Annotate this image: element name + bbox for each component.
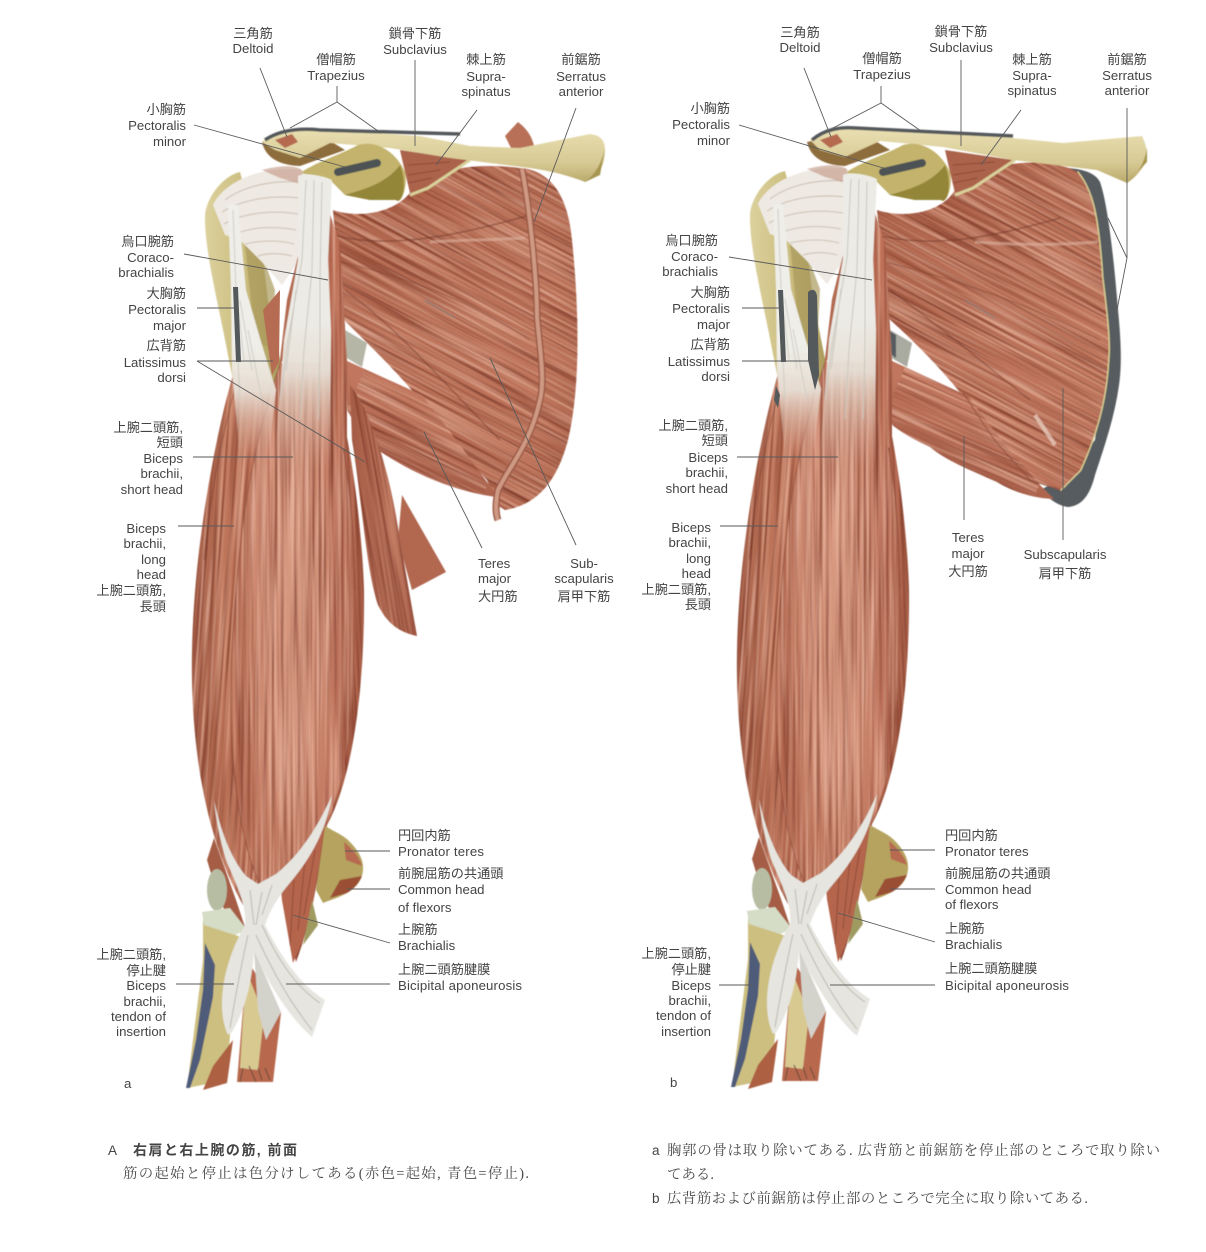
label: Biceps tendon of insertion: insertion [116, 1024, 166, 1039]
label: Biceps short head: 短頭 [702, 433, 728, 448]
label: Serratus anterior: Serratus [556, 69, 606, 84]
label: Biceps short head: 上腕二頭筋, [658, 417, 728, 433]
label: Trapezius: 僧帽筋 [862, 50, 902, 66]
label: Coracobrachialis: 烏口腕筋 [665, 232, 718, 248]
label: Brachialis: Brachialis [945, 937, 1003, 952]
humerus [205, 172, 284, 395]
label: Teres major: 大円筋 [948, 563, 988, 579]
label: Serratus anterior: anterior [1105, 83, 1150, 98]
label: Pectoralis major: 大胸筋 [690, 284, 730, 300]
label: Coracobrachialis: brachialis [118, 265, 174, 280]
label: Latissimus dorsi: 広背筋 [146, 337, 186, 353]
label: Supraspinatus: 棘上筋 [1012, 51, 1052, 67]
label: Biceps short head: Biceps [143, 451, 183, 466]
panel b leader lines [719, 60, 1127, 985]
brachialis muscle [280, 813, 327, 963]
artist signature [240, 1066, 270, 1082]
label: Pectoralis minor: 小胸筋 [690, 100, 730, 116]
latissimus dorsi flap [398, 495, 446, 590]
supraspinatus muscle [400, 150, 470, 195]
label: Biceps long head: Biceps [671, 520, 711, 535]
clavicle [810, 127, 1147, 183]
panel a arm: humerus, biceps, brachialis, forearm bones [151, 166, 397, 1090]
label: Common head of flexors: 前腕屈筋の共通頭 [398, 865, 504, 881]
serratus anterior strap [496, 169, 542, 520]
label: Subscapularis: 肩甲下筋 [1039, 565, 1091, 581]
label: Biceps long head: 上腕二頭筋, [641, 581, 711, 597]
label: Trapezius: Trapezius [853, 67, 911, 82]
label: Pronator teres: 円回内筋 [398, 827, 451, 843]
panel a leader lines [176, 60, 576, 984]
label: Serratus anterior: Serratus [1102, 68, 1152, 83]
label: Pectoralis major: 大胸筋 [146, 285, 186, 301]
label: Trapezius: Trapezius [307, 68, 365, 83]
label: Biceps long head: long [141, 552, 166, 567]
panel b extras: pectoralis and latissimus insertion marks [774, 290, 819, 408]
subscapularis muscle [332, 165, 578, 511]
humerus trochlea [207, 869, 227, 911]
label: Pronator teres: 円回内筋 [945, 827, 998, 843]
label: Latissimus dorsi: Latissimus [124, 355, 186, 370]
label: Serratus anterior: 前鋸筋 [1107, 51, 1147, 67]
label: Subclavius: 鎖骨下筋 [389, 25, 441, 41]
label: Common head of flexors: Common head [945, 882, 1032, 897]
label: Latissimus dorsi: 広背筋 [690, 336, 730, 352]
label: Brachialis: 上腕筋 [398, 921, 438, 937]
teres major muscle [346, 360, 494, 498]
panel letter b: b [670, 1075, 677, 1090]
label: Common head of flexors: Common head [398, 882, 484, 897]
caption: notes a and b [652, 1141, 1160, 1207]
coracobrachialis muscle [310, 200, 355, 455]
label: Serratus anterior: 前鋸筋 [561, 51, 601, 67]
scapula cream rim [1060, 172, 1109, 490]
note a continuation: てある. [667, 1167, 714, 1183]
label: Biceps short head: short head [666, 481, 728, 496]
panel a labels [96, 25, 614, 1091]
figure letter A: A [108, 1143, 117, 1158]
label: Biceps tendon of insertion: Biceps [671, 978, 711, 993]
biceps long head tendon [228, 205, 276, 460]
supraspinatus muscle [945, 150, 1015, 195]
panel b shoulder: scapula, clavicle and shoulder muscles [806, 125, 1148, 508]
biceps long head [151, 356, 319, 924]
label: Pectoralis minor: Pectoralis [128, 118, 186, 133]
label: Subclavius: Subclavius [383, 42, 447, 57]
label: Coracobrachialis: Coraco- [671, 249, 718, 264]
label: Supraspinatus: spinatus [461, 84, 511, 99]
note a text: 胸郭の骨は取り除いてある. 広背筋と前鋸筋を停止部のところで取り除い [667, 1141, 1160, 1159]
label: Serratus anterior: anterior [559, 84, 604, 99]
label: Subscapularis: scapularis [554, 571, 614, 586]
label: Biceps tendon of insertion: Biceps [126, 978, 166, 993]
grey tendon behind the arm [890, 330, 912, 367]
label: Deltoid: Deltoid [232, 41, 274, 56]
label: Pectoralis minor: 小胸筋 [146, 101, 186, 117]
label: Deltoid: 三角筋 [780, 24, 820, 40]
label: Subscapularis: Subscapularis [1024, 547, 1107, 562]
clavicle [262, 128, 605, 182]
note b text: 広背筋および前鋸筋は停止部のところで完全に取り除いてある. [667, 1189, 1088, 1207]
label: Biceps tendon of insertion: tendon of [656, 1008, 711, 1023]
label: Deltoid: Deltoid [779, 40, 821, 55]
label: Teres major: Teres [952, 530, 985, 545]
panel b labels [641, 23, 1152, 1090]
label: Pectoralis major: major [153, 318, 187, 333]
label: Pectoralis minor: minor [697, 133, 731, 148]
coracoid process [845, 144, 951, 201]
note b marker: b [652, 1191, 660, 1206]
label: Subscapularis: 肩甲下筋 [558, 588, 610, 604]
label: Biceps short head: brachii, [140, 466, 183, 481]
acromion underside [262, 136, 345, 166]
biceps distal tendon and aponeurosis [214, 795, 332, 1040]
label: Coracobrachialis: 烏口腕筋 [121, 233, 174, 249]
label: Subclavius: 鎖骨下筋 [935, 23, 987, 39]
label: Biceps tendon of insertion: tendon of [111, 1009, 166, 1024]
label: Common head of flexors: of flexors [945, 897, 999, 912]
grey tendon behind the arm [345, 330, 367, 367]
label: Bicipital aponeurosis: 上腕二頭筋腱膜 [945, 960, 1037, 976]
label: Teres major: major [952, 546, 985, 561]
biceps short head [200, 350, 390, 910]
panel b arm: humerus, biceps, brachialis, forearm bones [696, 165, 942, 1089]
acromion underside [807, 136, 890, 166]
subscapularis muscle [876, 162, 1109, 490]
label: Latissimus dorsi: dorsi [701, 369, 730, 384]
label: Pronator teres: Pronator teres [945, 844, 1029, 859]
medial epicondyle with pronator teres and common flexor heads [316, 826, 363, 903]
label: Pronator teres: Pronator teres [398, 844, 484, 859]
label: Biceps long head: brachii, [668, 535, 711, 550]
subscapularis lower edge over teres major [963, 393, 1060, 490]
label: Pectoralis minor: minor [153, 134, 187, 149]
label: Biceps long head: head [137, 567, 166, 582]
label: Biceps short head: brachii, [685, 465, 728, 480]
label: Biceps long head: 上腕二頭筋, [96, 582, 166, 598]
figure note: 筋の起始と停止は色分けしてある(赤色=起始, 青色=停止). [123, 1164, 529, 1182]
label: Bicipital aponeurosis: Bicipital aponeurosis [945, 978, 1069, 993]
shoulder joint capsule [213, 166, 306, 285]
label: Biceps tendon of insertion: brachii, [123, 994, 166, 1009]
label: Biceps long head: 長頭 [140, 599, 166, 614]
deep arm muscle mass [255, 357, 397, 972]
label: Biceps tendon of insertion: 停止腱 [671, 962, 711, 977]
label: Biceps long head: long [686, 551, 711, 566]
panel letter a: a [124, 1076, 132, 1091]
label: Biceps short head: Biceps [688, 450, 728, 465]
label: Biceps tendon of insertion: 上腕二頭筋, [641, 945, 711, 961]
label: Biceps long head: head [682, 566, 711, 581]
scapula grey border [1040, 168, 1121, 507]
label: Teres major: 大円筋 [478, 588, 518, 604]
label: Biceps tendon of insertion: brachii, [668, 993, 711, 1008]
label: Biceps short head: short head [121, 482, 183, 497]
label: Supraspinatus: spinatus [1007, 83, 1057, 98]
label: Subclavius: Subclavius [929, 40, 993, 55]
label: Coracobrachialis: Coraco- [127, 250, 174, 265]
caption: figure A title and note [108, 1142, 529, 1182]
label: Deltoid: 三角筋 [233, 25, 273, 41]
label: Bicipital aponeurosis: 上腕二頭筋腱膜 [398, 961, 490, 977]
ulna [237, 960, 281, 1082]
figure title: 右肩と右上腕の筋, 前面 [133, 1142, 297, 1158]
panel a extras: pectoralis insertion and latissimus remnant [233, 287, 280, 375]
label: Pectoralis major: Pectoralis [672, 301, 730, 316]
label: Bicipital aponeurosis: Bicipital aponeurosis [398, 978, 522, 993]
muscle strip left of short head tendon [279, 240, 302, 368]
label: Biceps short head: 上腕二頭筋, [113, 419, 183, 435]
label: Supraspinatus: 棘上筋 [466, 51, 506, 67]
label: Biceps long head: Biceps [126, 521, 166, 536]
label: Supraspinatus: Supra- [466, 69, 506, 84]
label: Biceps short head: 短頭 [157, 435, 183, 450]
label: Biceps long head: brachii, [123, 536, 166, 551]
label: Common head of flexors: of flexors [398, 900, 452, 915]
label: Subscapularis: Sub- [570, 556, 598, 571]
label: Supraspinatus: Supra- [1012, 68, 1052, 83]
label: Pectoralis major: major [697, 317, 731, 332]
label: Common head of flexors: 前腕屈筋の共通頭 [945, 865, 1050, 881]
label: Biceps long head: 長頭 [685, 597, 711, 612]
label: Brachialis: 上腕筋 [945, 920, 985, 936]
dark tendon insertion [888, 330, 896, 358]
label: Latissimus dorsi: Latissimus [668, 354, 730, 369]
label: Teres major: Teres [478, 556, 511, 571]
label: Biceps tendon of insertion: 停止腱 [126, 963, 166, 978]
label: Pectoralis major: Pectoralis [128, 302, 186, 317]
panel a shoulder: scapula, clavicle and shoulder muscles [262, 122, 606, 637]
label: Latissimus dorsi: dorsi [157, 370, 186, 385]
label: Pectoralis minor: Pectoralis [672, 117, 730, 132]
serratus anterior top fragment [505, 122, 534, 150]
latissimus dorsi strap [350, 386, 418, 637]
note a marker: a [652, 1143, 660, 1158]
label: Coracobrachialis: brachialis [662, 264, 718, 279]
label: Trapezius: 僧帽筋 [316, 51, 356, 67]
radius [186, 908, 247, 1090]
label: Teres major: major [478, 571, 512, 586]
biceps short head tendon [274, 174, 332, 470]
coracoid process [300, 144, 406, 201]
brachialis, left edge [207, 838, 246, 930]
label: Biceps tendon of insertion: 上腕二頭筋, [96, 946, 166, 962]
label: Biceps tendon of insertion: insertion [661, 1024, 711, 1039]
teres major muscle [891, 360, 1054, 500]
label: Brachialis: Brachialis [398, 938, 456, 953]
